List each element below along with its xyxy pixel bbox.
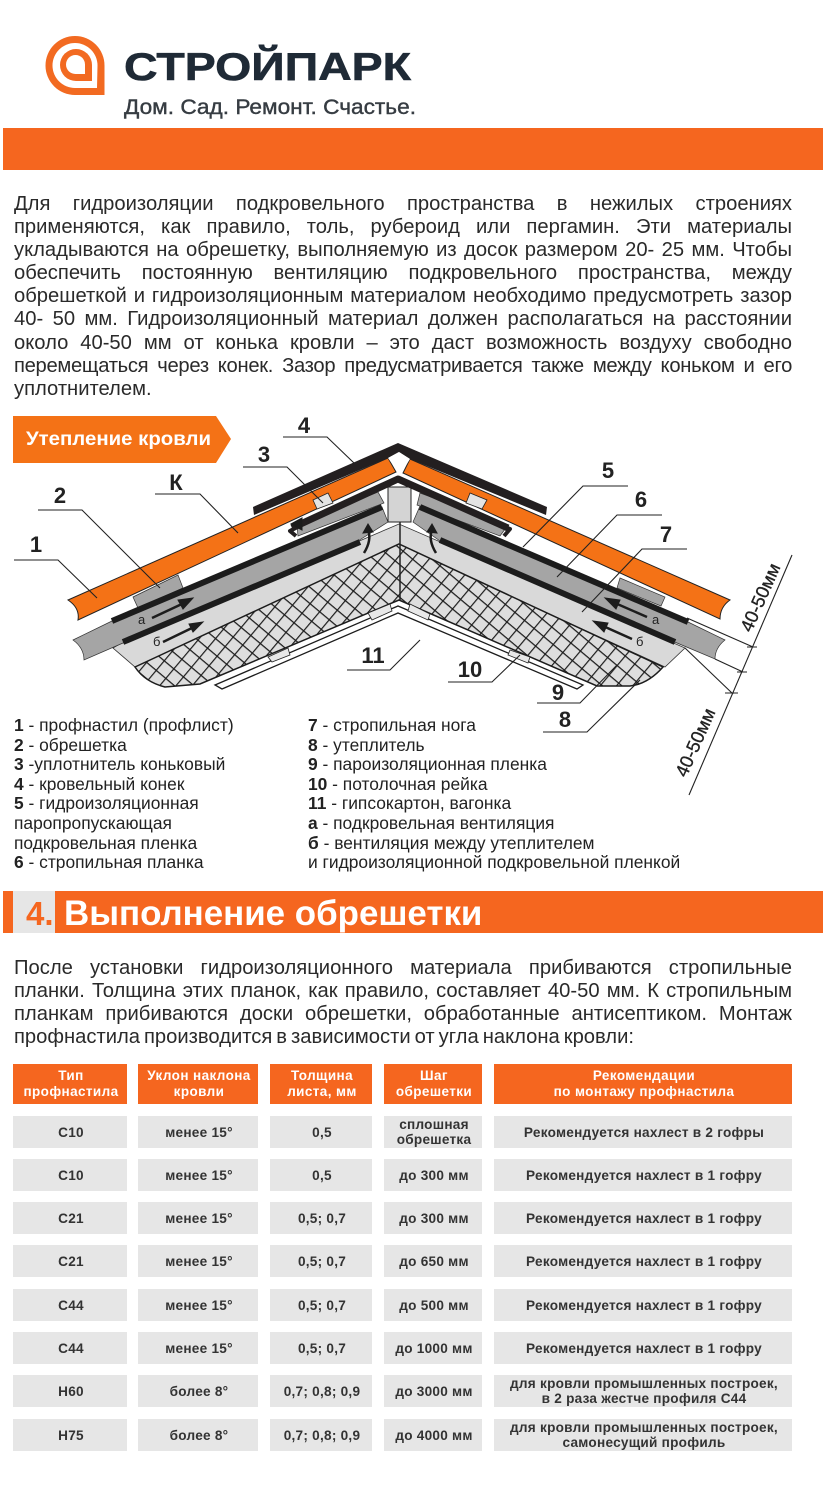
waterproofing membrane [112, 507, 688, 642]
table row 2: Рекомендуется нахлест в 1 гофру [526, 1168, 762, 1183]
table row 6: Рекомендуется нахлест в 1 гофру [526, 1341, 762, 1356]
table row 5: менее 15° [165, 1298, 233, 1313]
table row 4: 0,5; 0,7 [298, 1254, 346, 1269]
legend right: б - вентиляция между утеплителем [308, 833, 594, 853]
intro text: около 40-50 мм от конька кровли – это даст возможность воздуху свободно [14, 332, 792, 354]
ridge gray straps [297, 492, 384, 536]
table row 7: более 8° [170, 1384, 228, 1399]
table row 1: Рекомендуется нахлест в 2 гофры [524, 1125, 764, 1140]
airflow arrows [152, 518, 647, 642]
part numbers: 6 [635, 487, 647, 512]
top orange bar [3, 128, 823, 170]
legend right: 9 - пароизоляционная пленка [308, 754, 547, 774]
logo [46, 36, 416, 119]
table row 5: Рекомендуется нахлест в 1 гофру [526, 1298, 762, 1313]
ridge cap [253, 443, 547, 536]
legend left: 5 - гидроизоляционная [14, 793, 199, 813]
table row 3 [13, 1202, 792, 1234]
table row 1: обрешетка [397, 1132, 471, 1146]
table header: кровли [174, 1084, 224, 1099]
rafter gray [73, 507, 388, 660]
table header: Толщина [291, 1068, 353, 1083]
legend right: 10 - потолочная рейка [308, 774, 488, 794]
arrow labels: б [153, 634, 160, 649]
intro text: 40- 50 мм. Гидроизоляционный материал должен располагаться на расстоянии [14, 308, 792, 330]
table row 1: менее 15° [165, 1125, 233, 1140]
part numbers [30, 413, 672, 732]
part numbers: 4 [298, 413, 311, 438]
center line [399, 522, 401, 600]
table header: Рекомендации [593, 1068, 695, 1083]
table row 6: до 1000 мм [395, 1341, 473, 1356]
arrow labels: а [138, 612, 146, 627]
part numbers: 2 [54, 483, 66, 508]
dimension labels [671, 560, 784, 780]
table header: профнастила [23, 1084, 119, 1099]
dimension lines [685, 555, 792, 795]
body text: планкам прибиваются доски обрешетки, обработанные антисептиком. Монтаж [14, 1003, 792, 1025]
table row 8 [13, 1419, 792, 1451]
table row 7: 0,7; 0,8; 0,9 [284, 1384, 360, 1399]
table row 5: С44 [58, 1298, 84, 1313]
tag: roof insulation [13, 416, 231, 463]
body text: профнастила производится в зависимости от угла наклона кровли: [14, 1026, 634, 1048]
intro text: Для гидроизоляции подкровельного пространства в нежилых строениях [14, 193, 792, 215]
part numbers: 3 [258, 442, 270, 467]
table row 6: менее 15° [165, 1341, 233, 1356]
part numbers: 8 [559, 707, 571, 732]
table header: листа, мм [287, 1084, 357, 1099]
table row 8: самонесущий профиль [563, 1434, 725, 1450]
part numbers: 9 [552, 680, 564, 705]
body text [14, 957, 792, 1048]
table row 5: 0,5; 0,7 [298, 1298, 346, 1313]
table row 6 [13, 1332, 792, 1364]
brand name: СТРОЙПАРК [124, 44, 411, 89]
table row 2 [13, 1159, 792, 1191]
table row 2: менее 15° [165, 1168, 233, 1183]
intro text [14, 193, 792, 400]
table row 3: менее 15° [165, 1211, 233, 1226]
table row 6: С44 [58, 1341, 84, 1356]
table row 8: до 4000 мм [395, 1428, 473, 1443]
legend left: 2 - обрешетка [14, 735, 127, 755]
icon: location pin [46, 36, 104, 95]
table header: Уклон наклона [147, 1068, 251, 1083]
part numbers: 7 [660, 522, 672, 547]
table row 8: 0,7; 0,8; 0,9 [284, 1428, 360, 1443]
tag: roof insulation: Утепление кровли [26, 428, 211, 450]
section heading [3, 891, 823, 933]
table row 7: до 3000 мм [395, 1384, 473, 1399]
table row 4 [13, 1245, 792, 1277]
body text: планки. Толщина этих планок, как правило, составляет 40-50 мм. К стропильным [14, 980, 792, 1002]
legend left: подкровельная пленка [14, 833, 197, 853]
table row 4: до 650 мм [399, 1254, 469, 1269]
table row 4: менее 15° [165, 1254, 233, 1269]
table row 3: 0,5; 0,7 [298, 1211, 346, 1226]
table row 6: 0,5; 0,7 [298, 1341, 346, 1356]
dimension labels: 40-50мм [671, 705, 719, 780]
table header: Шаг [420, 1068, 448, 1083]
legend right: 11 - гипсокартон, вагонка [308, 793, 511, 813]
part numbers: 11 [361, 643, 385, 668]
table row 5 [13, 1289, 792, 1321]
part numbers: К [169, 470, 183, 495]
table row 3: С21 [58, 1211, 84, 1226]
table row 4: Рекомендуется нахлест в 1 гофру [526, 1254, 762, 1269]
legend left: 4 - кровельный конек [14, 774, 184, 794]
table row 7: Н60 [58, 1384, 84, 1399]
ceiling strip [215, 604, 583, 689]
legend left: 6 - стропильная планка [14, 852, 204, 872]
intro text: уплотнителем. [14, 378, 152, 400]
intro text: применяются, как правило, толь, рубероид или пергамин. Эти материалы [14, 216, 792, 238]
arrow labels [138, 612, 660, 649]
table row 3: до 300 мм [399, 1211, 469, 1226]
table row 5: до 500 мм [399, 1298, 469, 1313]
light gray insulation band [113, 524, 685, 667]
intro text: обрешеткой и гидроизоляционным материалом необходимо предусмотреть зазор [14, 285, 792, 307]
table row 2: до 300 мм [399, 1168, 469, 1183]
legend left: паропропускающая [14, 813, 172, 833]
gap at ridge [388, 452, 410, 475]
roof diagram [14, 413, 792, 796]
legend right: 8 - утеплитель [308, 735, 425, 755]
legend left: 1 - профнастил (профлист) [14, 715, 234, 735]
center ridge block [388, 487, 411, 522]
table row 1 [13, 1116, 792, 1148]
arrow labels: б [636, 634, 643, 649]
table header: обрешетки [396, 1084, 472, 1099]
table row 8: более 8° [170, 1428, 228, 1443]
legend right: и гидроизоляционной подкровельной пленкой [308, 852, 680, 872]
arrow labels: а [652, 612, 660, 627]
section number: 4. [26, 895, 54, 932]
table row 4: С21 [58, 1254, 84, 1269]
leader lines [14, 437, 687, 732]
table row 1: 0,5 [312, 1125, 332, 1140]
intro text: перемещаться через конек. Зазор предусматривается также между коньком и его [14, 355, 792, 377]
table header: по монтажу профнастила [554, 1084, 734, 1099]
ridge seals [313, 493, 487, 509]
table row 7 [13, 1375, 792, 1407]
part numbers: 5 [602, 458, 614, 483]
table row 8: для кровли промышленных построек, [510, 1420, 778, 1434]
legend right [308, 715, 680, 872]
table row 2: С10 [58, 1168, 84, 1183]
table row 1: сплошная [399, 1116, 469, 1132]
table row 7: в 2 раза жестче профиля С44 [542, 1390, 746, 1406]
tagline: Дом. Сад. Ремонт. Счастье. [124, 95, 416, 119]
intro text: обеспечить постоянную вентиляцию подкровельного пространства, между [14, 262, 792, 284]
table row 3: Рекомендуется нахлест в 1 гофру [526, 1211, 762, 1226]
legend left: 3 -уплотнитель коньковый [14, 754, 225, 774]
intro text: укладываются на обрешетку, выполняемую из досок размером 20- 25 мм. Чтобы [14, 239, 792, 261]
legend right: а - подкровельная вентиляция [308, 813, 554, 833]
dimension labels: 40-50мм [736, 560, 784, 635]
mesh insulation [135, 544, 663, 687]
table row 1: С10 [58, 1125, 84, 1140]
table row 7: для кровли промышленных построек, [510, 1376, 778, 1390]
legend right: 7 - стропильная нога [308, 715, 476, 735]
table header [13, 1064, 792, 1104]
batten gray [133, 575, 183, 608]
body text: После установки гидроизоляционного материала прибиваются стропильные [14, 957, 792, 979]
table header: Тип [58, 1068, 84, 1083]
table row 8: Н75 [58, 1428, 84, 1443]
legend left [14, 715, 234, 872]
part numbers: 10 [458, 657, 482, 682]
part numbers: 1 [30, 532, 42, 557]
orange roof sheets [68, 458, 730, 620]
section title: Выполнение обрешетки [64, 894, 482, 933]
section number [13, 891, 55, 933]
table row 2: 0,5 [312, 1168, 332, 1183]
